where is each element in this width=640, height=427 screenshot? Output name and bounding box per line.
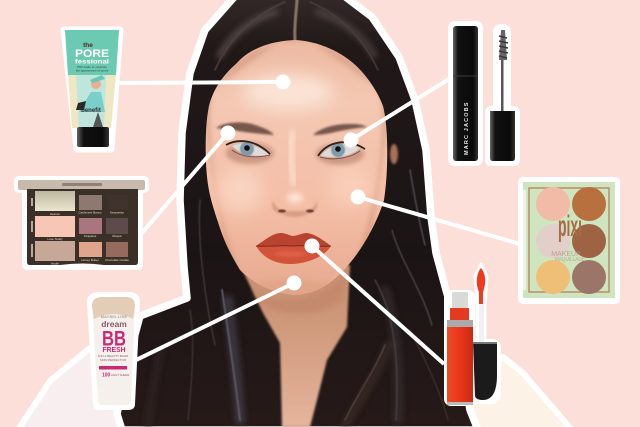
lower face shade	[267, 283, 315, 289]
product: mascara	[448, 21, 520, 166]
shoulder left	[18, 340, 135, 427]
product: contour palette: pixi	[558, 210, 582, 243]
product: BB cream tube: FRESH	[102, 347, 126, 354]
left face shadow	[206, 100, 237, 264]
product: eyeshadow palette: Chocolate Cookie	[105, 258, 129, 262]
hairline shadow	[218, 40, 370, 86]
cheek glow	[218, 168, 262, 212]
right eye	[316, 142, 365, 165]
product: BB cream tube: LIGHT SHEER	[111, 373, 129, 377]
connector: forehead to primer	[118, 74, 290, 90]
product: primer tube: the	[83, 42, 93, 49]
product: BB cream tube: BB	[102, 328, 126, 350]
shoulder right	[460, 357, 572, 427]
product: eyeshadow palette: Cashmere Bunny	[78, 210, 102, 214]
product: eyeshadow palette: Sexpresso	[110, 210, 124, 214]
connector: lips to lipstick	[304, 238, 444, 364]
product: BB cream tube: 8-IN-1 BEAUTY BALM	[98, 354, 129, 358]
neck shadow	[250, 275, 345, 314]
product: eyeshadow palette: Nudie	[51, 262, 59, 266]
ear right	[390, 144, 398, 164]
product: primer tube: PRO balm to minimize	[77, 65, 107, 69]
face	[200, 30, 392, 296]
product: primer tube	[64, 30, 120, 149]
mascara wand	[501, 58, 504, 112]
nose	[272, 130, 317, 217]
lips	[256, 233, 331, 264]
right face shadow	[358, 102, 387, 251]
eyebrow right	[313, 124, 367, 135]
connector: chin to BB cream	[130, 276, 302, 363]
illustrated woman	[76, 75, 105, 127]
connector: lashes to mascara	[344, 79, 449, 148]
left eye	[226, 141, 274, 164]
product: BB cream tube: 100	[102, 372, 111, 378]
product: BB cream tube: dream	[101, 319, 127, 329]
product: eyeshadow palette: Love Teddy	[47, 237, 63, 241]
hair silhouette	[117, 0, 478, 427]
product: BB cream tube: MAYBELLINE	[101, 314, 128, 319]
lipstick wand	[477, 268, 485, 304]
product: eyeshadow palette	[14, 176, 149, 270]
product: contour palette: MAQUILLAGE	[555, 257, 585, 263]
product: primer tube: benefit	[81, 108, 101, 114]
product: lipstick	[444, 264, 501, 406]
product: primer tube: PORE	[75, 48, 109, 60]
product: eyeshadow palette: Heaven	[50, 212, 60, 216]
shade pans	[536, 187, 606, 294]
eyebrow left	[216, 122, 274, 135]
hair sheen	[148, 12, 398, 425]
forehead highlight	[242, 74, 334, 110]
product: mascara: MARC JACOBS	[464, 101, 470, 155]
product: contour palette	[518, 177, 620, 304]
hair streaks	[188, 0, 448, 420]
product: BB cream tube	[87, 292, 140, 410]
product: eyeshadow palette: Strapless	[84, 234, 97, 238]
product: eyeshadow palette: Risqué	[112, 234, 122, 238]
connector: brow to eyeshadow palette	[141, 126, 236, 234]
shade pans	[35, 191, 128, 261]
product: BB cream tube: SKIN PERFECTOR	[100, 358, 127, 362]
lipstick tube	[452, 292, 468, 308]
product: primer tube: fessional	[75, 58, 109, 66]
connector: cheek to contour palette	[350, 190, 520, 244]
product: primer tube: the appearance of pores	[76, 68, 109, 72]
product: contour palette: MAKEUP	[551, 251, 581, 258]
product: eyeshadow palette: Honey Butter	[81, 258, 99, 262]
neck and chest	[240, 265, 350, 427]
